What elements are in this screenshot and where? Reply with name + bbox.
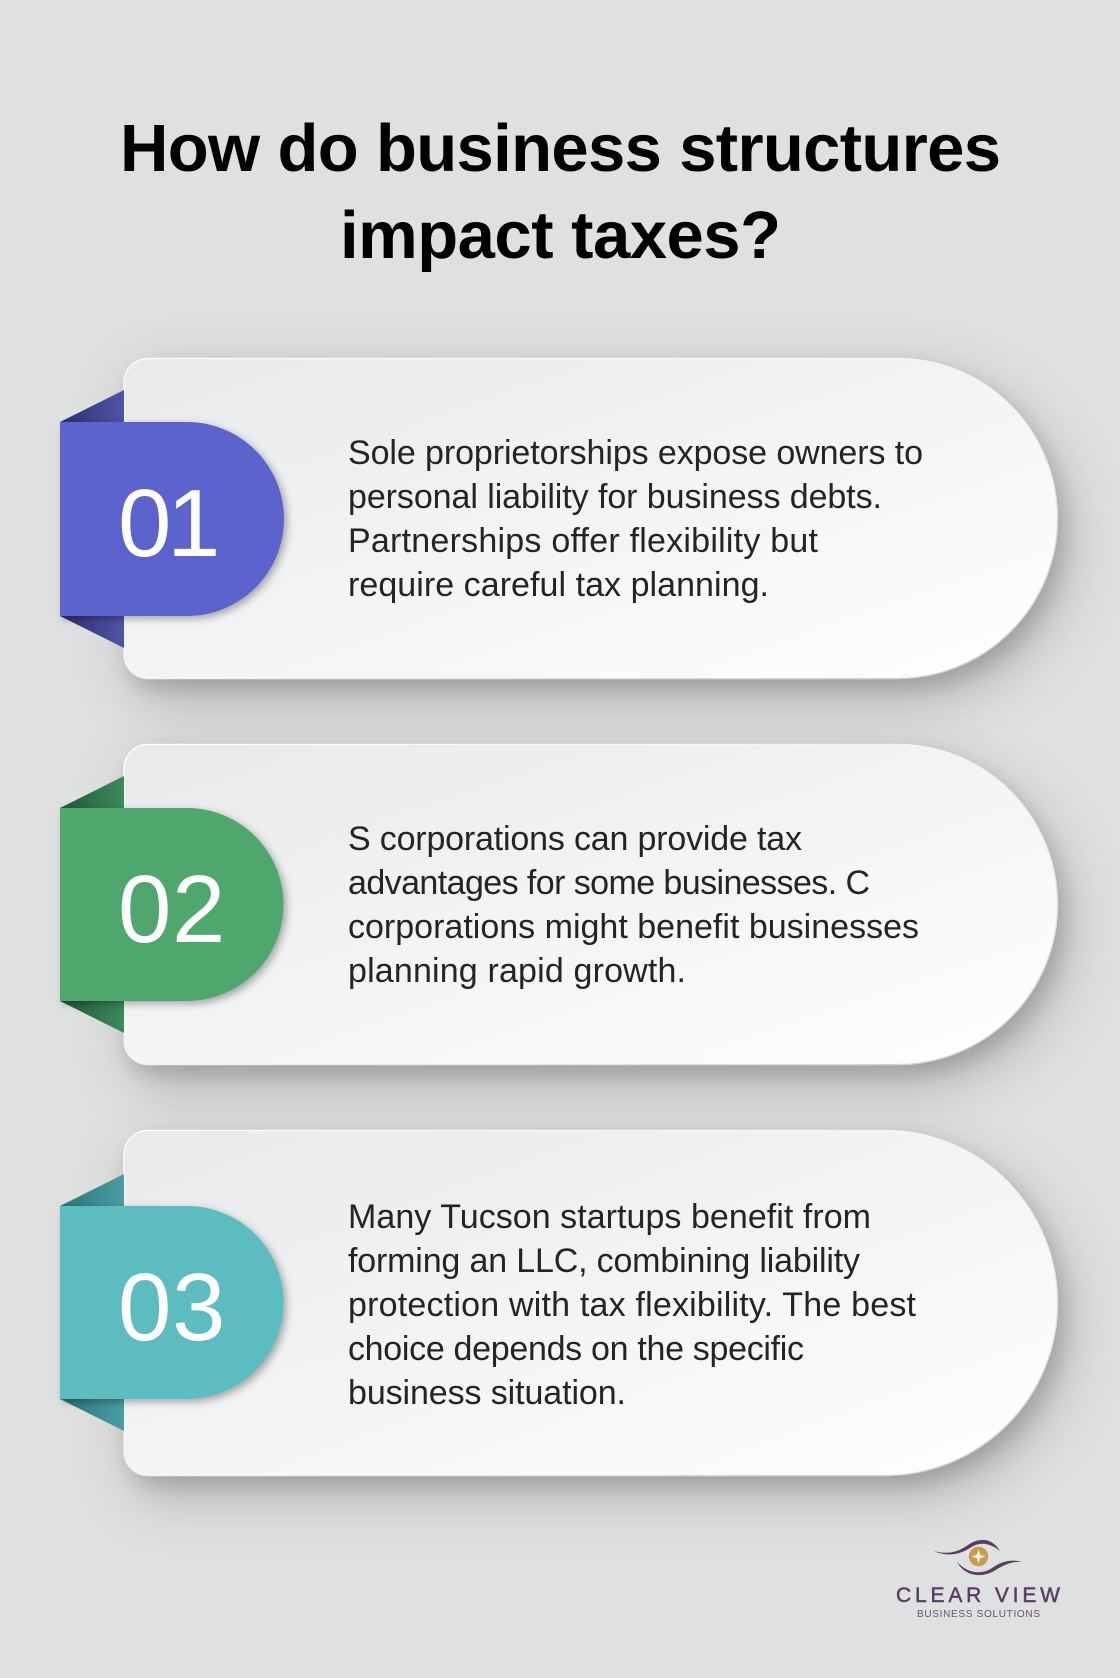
panel: step 02 (60, 744, 1058, 1064)
number 02: 02 (118, 856, 225, 963)
text 01: Sole proprietorships expose owners to (348, 434, 923, 472)
title: impact taxes? (340, 198, 781, 273)
number badge 03 (60, 1206, 284, 1399)
text 03: forming an LLC, combining liability (348, 1242, 860, 1280)
fold bottom 02 (60, 1001, 124, 1033)
number 03: 03 (118, 1254, 225, 1361)
icon: gold circle with star (969, 1547, 988, 1566)
fold top 02 (60, 776, 124, 808)
title: How do business structures (120, 111, 1001, 186)
text 02: S corporations can provide tax (348, 820, 802, 858)
text 03 (348, 1198, 917, 1412)
title (120, 111, 1001, 273)
text 02 (348, 820, 919, 990)
icon: eye lower swoosh (957, 1561, 1022, 1575)
fold top 03 (60, 1174, 124, 1206)
text 02: corporations might benefit businesses (348, 908, 919, 946)
text 03: business situation. (348, 1374, 626, 1412)
text 02: planning rapid growth. (348, 952, 686, 990)
text 03: Many Tucson startups benefit from (348, 1198, 871, 1236)
fold bottom 03 (60, 1399, 124, 1431)
text 01: Partnerships offer flexibility but (348, 522, 819, 560)
panel: step 01 (60, 358, 1057, 678)
card 01 background (124, 358, 1057, 678)
number badge 02 (60, 808, 284, 1001)
icon: eye upper swoosh (934, 1540, 1000, 1554)
text 03: choice depends on the specific (348, 1330, 804, 1368)
text 03: protection with tax flexibility. The best (348, 1286, 917, 1324)
text 01: require careful tax planning. (348, 566, 769, 604)
fold bottom 01 (60, 616, 124, 648)
number 01: 01 (118, 470, 220, 577)
logo tagline: BUSINESS SOLUTIONS (917, 1609, 1040, 1620)
fold top 01 (60, 390, 124, 422)
number badge 01 (60, 422, 284, 616)
text 01: personal liability for business debts. (348, 478, 882, 516)
text 01 (348, 434, 923, 604)
text 02: advantages for some businesses. C (348, 864, 870, 902)
panel: step 03 (60, 1130, 1058, 1476)
card 02 background (124, 744, 1058, 1064)
logo: Clear View Business Solutions (896, 1540, 1060, 1620)
logo wordmark: CLEAR VIEW (896, 1584, 1060, 1607)
card 03 background (124, 1130, 1058, 1476)
